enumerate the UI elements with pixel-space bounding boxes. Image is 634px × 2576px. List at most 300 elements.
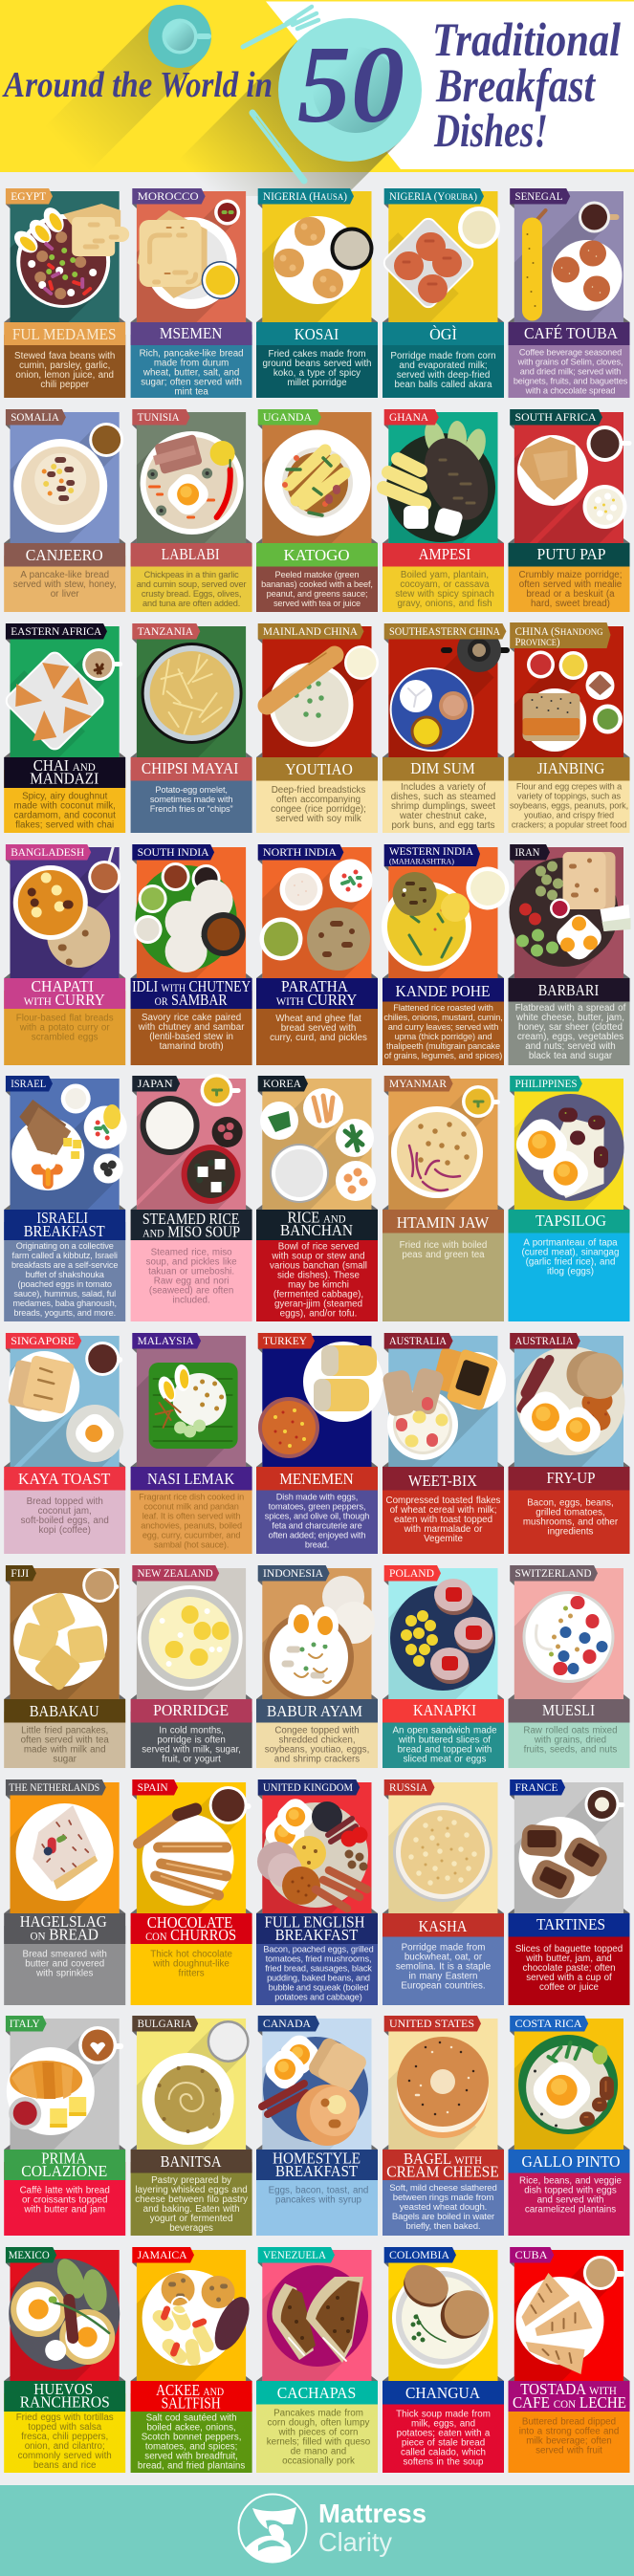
- illustration: banitsa: [45, 2020, 250, 2242]
- dish name: [383, 973, 504, 1002]
- dish name: STEAMED RICE: [142, 1210, 239, 1228]
- country tag: [384, 1333, 453, 1353]
- description: Boiled yam, plantain,: [401, 570, 489, 580]
- description: and tuna are often added.: [142, 599, 240, 608]
- description: gyeran-jjim (steamed: [274, 1299, 362, 1310]
- dish name: [509, 1694, 629, 1723]
- description: cream), eggs, vegetables: [517, 1032, 623, 1042]
- description: thalipeeth (multigrain pancake: [386, 1041, 500, 1051]
- dish name: [509, 1909, 629, 1937]
- country tag: [132, 844, 214, 864]
- description: [256, 2162, 378, 2236]
- description: [4, 1222, 125, 1321]
- illustration: hagelslag on bread: [0, 1803, 114, 1996]
- dish name: KATOGO: [283, 546, 350, 564]
- description: breads, yogurts, and more.: [13, 1308, 116, 1318]
- description: [256, 1926, 378, 2005]
- description: farm called a kibbutz, Israeli: [12, 1251, 118, 1260]
- dish name: BABUR AYAM: [267, 1702, 362, 1720]
- country tag: [384, 2016, 481, 2036]
- description: tomatoes, fried mushrooms,: [266, 1954, 371, 1964]
- country tag: [510, 188, 570, 208]
- description: sometimes made with: [150, 795, 232, 804]
- country tag: [6, 2247, 56, 2267]
- dish name: [256, 1462, 378, 1490]
- description: [4, 556, 125, 612]
- dish name: BANCHAN: [280, 1221, 353, 1239]
- dish name: BABAKAU: [30, 1702, 99, 1720]
- illustration: chocolate con churros: [45, 1786, 251, 2003]
- dish name: [4, 2145, 125, 2180]
- description: with pieces of corn: [278, 2428, 358, 2438]
- dish name: [131, 2376, 252, 2412]
- description: kernels; filled with queso: [267, 2437, 371, 2448]
- description: Bagels are boiled in water: [392, 2212, 495, 2222]
- dish name: KAYA TOAST: [18, 1470, 110, 1488]
- dish name: [256, 753, 378, 780]
- country tag: FRANCE: [514, 1780, 558, 1794]
- dish name: [509, 2376, 629, 2412]
- description: and evaporated milk;: [399, 360, 488, 371]
- dish name: ON BREAD: [30, 1926, 98, 1943]
- country tag: [132, 409, 190, 429]
- description: anchovies, peanuts, boiled: [141, 1521, 242, 1531]
- description: bread and topped with: [398, 1745, 492, 1756]
- illustration: chapati with curry: [10, 847, 120, 978]
- icon: coffee cup: [148, 5, 211, 68]
- dish name: [4, 1909, 125, 1944]
- description: commonly served with: [18, 2451, 112, 2461]
- description: bananas) cooked with a beef,: [261, 579, 373, 589]
- dish name: RICE AND: [287, 1209, 346, 1226]
- description: Savory rice cake paired: [142, 1013, 241, 1023]
- country tag: EASTERN AFRICA: [11, 624, 102, 638]
- description: [383, 1479, 504, 1554]
- dish name: [256, 1205, 378, 1240]
- dish name: ISRAELI: [36, 1209, 88, 1227]
- description: [4, 2162, 125, 2236]
- dish name: [131, 1462, 252, 1490]
- dish name: [383, 753, 504, 780]
- description: [509, 1222, 629, 1321]
- illustration: ackee and saltfish: [47, 2270, 256, 2461]
- dish name: KANDE POHE: [396, 982, 490, 1000]
- country tag: POLAND: [389, 1566, 434, 1580]
- dish name: WEET-BIX: [408, 1472, 477, 1490]
- card: Menemen: [256, 1333, 383, 1554]
- card: Homestyle Breakfast: [172, 2016, 378, 2236]
- dish name: KOSAI: [295, 325, 339, 343]
- description: beignets, fruits, and baguettes: [514, 376, 628, 385]
- illustration: babakau: [0, 1568, 119, 1783]
- dish name: [256, 1694, 378, 1723]
- illustration: prima colazione: [0, 2026, 123, 2235]
- dish name: AMPESI: [419, 545, 470, 563]
- country tag: [258, 2247, 335, 2267]
- illustration: canjeero: [10, 423, 123, 543]
- card: Steamed Rice and Miso Soup: [27, 1074, 252, 1321]
- description: (fermented cabbage),: [273, 1290, 363, 1300]
- description: breakfasts are a self-service: [11, 1260, 118, 1270]
- description: Soft, mild cheese slathered: [389, 2183, 497, 2194]
- description: variety of toppings, such as: [517, 792, 622, 801]
- description: [256, 335, 378, 398]
- country tag: SOUTH INDIA: [138, 845, 209, 859]
- dish name: [509, 317, 629, 345]
- description: Fried cakes made from: [269, 349, 365, 360]
- description: Flour and egg crepes with a: [516, 782, 623, 792]
- description: shredded chicken,: [278, 1735, 356, 1745]
- dish name: CANJEERO: [26, 546, 103, 564]
- illustration: rice and banchan: [136, 1088, 376, 1317]
- description: Pastry prepared by: [151, 2175, 231, 2186]
- country tag: MAINLAND CHINA: [263, 624, 358, 638]
- country tag: SOUTH AFRICA: [514, 410, 597, 424]
- country tag: [6, 1333, 81, 1353]
- description: with soup or stew and: [271, 1252, 365, 1262]
- description: side dishes). These: [277, 1271, 361, 1281]
- country tag: [132, 623, 200, 644]
- dish name: OR SAMBAR: [155, 991, 228, 1009]
- logo wordmark: [318, 2499, 426, 2557]
- card: Gallo Pinto: [425, 2016, 629, 2236]
- description: with butter, jam, and: [525, 1954, 612, 1964]
- illustration: idli: [134, 862, 246, 978]
- country tag: CANADA: [263, 2017, 311, 2030]
- dish name: KASHA: [419, 1917, 467, 1935]
- country tag: [6, 1565, 36, 1585]
- dish name: JIANBING: [537, 759, 604, 777]
- description: with a potato curry or: [19, 1023, 110, 1034]
- description: served with deep-fried: [397, 370, 490, 381]
- card: Barbari: [509, 844, 631, 1065]
- dish name: [383, 1462, 504, 1490]
- dish name: IDLI WITH CHUTNEY: [132, 977, 251, 995]
- description: and baking. Eaten with: [143, 2204, 240, 2215]
- description: peas and green tea: [402, 1250, 485, 1260]
- description: [4, 2393, 125, 2473]
- illustration: porridge: [47, 1585, 243, 1781]
- dish name: BANITSA: [161, 2152, 222, 2171]
- dish name: [4, 753, 125, 788]
- description: cardamom, and coconut: [14, 811, 116, 821]
- dish name: DIM SUM: [410, 759, 475, 777]
- description: served with stew, honey,: [13, 579, 117, 590]
- description: and dried milk; served with: [520, 366, 621, 376]
- illustration: babur ayam: [165, 1576, 375, 1801]
- dish name: [131, 1909, 252, 1944]
- card: Cafe Touba: [509, 188, 629, 398]
- description: [4, 1712, 125, 1768]
- description: [383, 991, 504, 1065]
- card: Chai and Mandazi: [0, 623, 125, 844]
- country tag: SOUTHEASTERN CHINA: [389, 624, 500, 638]
- description: included.: [172, 1296, 210, 1306]
- country tag: MOROCCO: [138, 189, 199, 203]
- dish name: [4, 973, 125, 1009]
- description: [383, 1926, 504, 2005]
- logo wordmark: Clarity: [318, 2527, 392, 2557]
- description: served with milk, sugar,: [142, 1745, 241, 1756]
- dish name: ACKEE AND: [156, 2381, 224, 2399]
- illustration: barbari: [421, 852, 631, 1056]
- country tag: FIJI: [11, 1566, 29, 1580]
- dish name: WITH CURRY: [24, 991, 105, 1009]
- description: Salt cod sautéed with: [146, 2413, 237, 2424]
- description: with doughnut-like: [152, 1958, 230, 1969]
- dish name: [256, 1909, 378, 1944]
- card: Tartines: [417, 1779, 629, 2005]
- illustration: huevos rancheros: [0, 2255, 120, 2457]
- description: [509, 556, 629, 612]
- country tag: [6, 188, 53, 208]
- dish name: [131, 973, 252, 1009]
- description: Flour-based flat breads: [16, 1014, 114, 1024]
- description: [131, 1926, 252, 2005]
- description: corn dough, often lumpy: [268, 2418, 370, 2429]
- card: Israeli Breakfast: [0, 1076, 127, 1321]
- dish name: [131, 1205, 252, 1241]
- country tag: [132, 188, 206, 208]
- illustration: israeli breakfast: [0, 1084, 127, 1312]
- description: made with coconut milk,: [14, 801, 116, 812]
- country tag: SWITZERLAND: [514, 1566, 592, 1580]
- dish name: HAGELSLAG: [20, 1912, 107, 1931]
- country tag: AUSTRALIA: [389, 1334, 447, 1347]
- description: (seaweed) are often: [149, 1286, 233, 1297]
- description: Steamed rice, miso: [151, 1248, 232, 1258]
- description: upma (thick porridge) and: [395, 1032, 492, 1041]
- description: congee (rice porridge);: [271, 804, 366, 815]
- description: takuan or umeboshi.: [148, 1267, 234, 1277]
- dish name: [131, 538, 252, 566]
- card: Htamin Jaw: [294, 1076, 504, 1321]
- country tag: [510, 622, 610, 652]
- country tag: [258, 1565, 330, 1585]
- dish name: CHAI AND: [33, 756, 96, 775]
- country tag: PHILIPPINES: [514, 1077, 578, 1090]
- description: milk beverage; often: [526, 2435, 612, 2446]
- country tag: MEXICO: [9, 2248, 50, 2261]
- description: [4, 1479, 125, 1554]
- country tag: [6, 623, 107, 644]
- description: served with soy milk: [275, 814, 361, 824]
- description: chilies, onions, mustard, cumin,: [383, 1013, 503, 1022]
- description: beverages: [169, 2223, 213, 2234]
- description: Eggs, bacon, toast, and: [269, 2185, 368, 2195]
- illustration: nasi lemak: [50, 1363, 238, 1549]
- description: [4, 770, 125, 833]
- dish name: MUESLI: [542, 1701, 595, 1719]
- country tag: NIGERIA (YORUBA): [389, 189, 477, 203]
- description: fritters: [178, 1968, 205, 1978]
- illustration: tartines: [417, 1787, 625, 2001]
- country tag: SENEGAL: [514, 189, 562, 203]
- description: [509, 770, 629, 833]
- description: served with breadfruit,: [144, 2452, 238, 2462]
- description: various banchan (small: [270, 1261, 367, 1272]
- description: fruits, seeds, and nuts: [524, 1745, 617, 1756]
- title: Dishes!: [433, 103, 548, 157]
- description: A portmanteau of tapa: [523, 1238, 618, 1249]
- description: Stewed fava beans with: [14, 351, 115, 361]
- dish name: FUL MEDAMES: [12, 325, 117, 343]
- illustration: weet-bix: [279, 1347, 506, 1568]
- illustration: youtiao: [258, 645, 379, 757]
- description: and shrimp crackers: [274, 1754, 360, 1764]
- dish name: [256, 317, 378, 345]
- description: Pancakes made from: [273, 2409, 363, 2419]
- dish name: KANAPKI: [413, 1701, 476, 1719]
- description: Flattened rice roasted with: [393, 1003, 493, 1013]
- country tag: VENEZUELA: [263, 2248, 326, 2261]
- description: Crumbly maize porridge;: [519, 570, 622, 580]
- country tag: WESTERN INDIA: [389, 844, 473, 858]
- country tag: [6, 1779, 106, 1800]
- country tag: INDONESIA: [263, 1566, 323, 1580]
- description: Includes a variety of: [401, 782, 486, 793]
- description: with chutney and sambar: [138, 1022, 245, 1033]
- dish name: COLAZIONE: [21, 2162, 107, 2180]
- description: (garlic fried rice), and: [526, 1257, 615, 1268]
- card: Jianbing: [509, 622, 629, 833]
- description: [383, 1222, 504, 1321]
- description: scrambled eggs: [32, 1033, 98, 1043]
- card: Prima Colazione: [0, 2016, 125, 2236]
- description: onion, and cilantro;: [25, 2441, 105, 2452]
- icon: knife: [252, 113, 304, 181]
- description: black tea and sugar: [529, 1051, 613, 1061]
- dish name: HOMESTYLE: [273, 2150, 361, 2167]
- description: Bread smeared with: [23, 1949, 107, 1959]
- card: Idli with Chutney or Sambar: [130, 844, 252, 1065]
- card: Muesli: [425, 1565, 629, 1780]
- dish name: [4, 2376, 125, 2412]
- dish name: CHAPATI: [31, 977, 94, 995]
- card: Fry-Up: [426, 1333, 629, 1554]
- description: bean balls called akara: [394, 380, 492, 390]
- dish name: BAGEL WITH: [404, 2150, 482, 2168]
- description: Slices of baguette topped: [515, 1944, 623, 1954]
- description: kopi (coffee): [39, 1525, 91, 1536]
- description: In cold months,: [159, 1726, 224, 1736]
- country tag: SOMALIA: [11, 410, 59, 424]
- illustration: kaya toast: [0, 1342, 123, 1577]
- country tag: GHANA: [389, 410, 428, 424]
- country tag: [510, 2016, 588, 2036]
- description: peanut, and greens sauce;: [267, 589, 367, 599]
- country tag: UNITED KINGDOM: [263, 1780, 353, 1794]
- description: [256, 2393, 378, 2473]
- description: Fried eggs with tortillas: [16, 2412, 114, 2423]
- description: [131, 335, 252, 398]
- country tag: [6, 2016, 47, 2036]
- country tag: [258, 188, 354, 208]
- description: [131, 2162, 252, 2236]
- description: often served with mealie: [519, 579, 623, 590]
- description: crusty bread. Eggs, olives,: [142, 589, 241, 599]
- description: may be kimchi: [288, 1280, 349, 1291]
- country tag: NORTH INDIA: [263, 845, 337, 859]
- dish name: CHOCOLATE: [147, 1913, 232, 1932]
- description: milk, eggs, and: [411, 2418, 475, 2429]
- description: with grains of Selim, cloves,: [517, 357, 623, 366]
- description: and nuts; served with: [525, 1041, 616, 1052]
- dish name: CON CHURROS: [145, 1926, 236, 1944]
- card: Chapati with Curry: [0, 844, 125, 1080]
- illustration: lablabi: [137, 431, 244, 543]
- description: Porridge made from corn: [390, 351, 496, 361]
- country tag: [510, 844, 550, 864]
- description: Fragrant rice dish cooked in: [139, 1493, 244, 1502]
- dish name: [509, 1205, 629, 1233]
- description: [4, 991, 125, 1065]
- description: buffet of shakshouka: [26, 1270, 105, 1279]
- description: occasionally pork: [282, 2456, 355, 2467]
- card: Msemen: [130, 188, 252, 398]
- country tag: [258, 1333, 315, 1353]
- title: [2, 12, 621, 157]
- card: Paratha with Curry: [256, 844, 378, 1065]
- description: fruit, or yogurt: [162, 1755, 221, 1765]
- dish name: NASI LEMAK: [147, 1470, 234, 1488]
- description: pudding, baked beans, and: [267, 1974, 370, 1983]
- description: [131, 770, 252, 833]
- country tag: SINGAPORE: [11, 1334, 75, 1347]
- description: or croissants topped: [22, 2194, 107, 2205]
- description: crackers; a popular street food: [512, 820, 626, 830]
- illustration: putu pap: [514, 426, 631, 543]
- title: Around the World in: [2, 65, 273, 105]
- illustration: chipsi mayai: [137, 643, 243, 757]
- dish name: PARATHA: [281, 977, 348, 995]
- dish name: [509, 538, 629, 566]
- description: [131, 2393, 252, 2473]
- country tag: [510, 1076, 582, 1096]
- description: softens in the soup: [403, 2456, 484, 2467]
- card: Nasi Lemak: [50, 1333, 252, 1554]
- card: Porridge: [47, 1565, 252, 1781]
- header banner: [0, 0, 634, 210]
- description: dish topped with eggs: [524, 2186, 617, 2196]
- description: chili pepper: [40, 380, 90, 390]
- dish name: CAFE CON LECHE: [513, 2393, 626, 2412]
- dish name: SALTFISH: [162, 2394, 221, 2412]
- dish name: MENEMEN: [279, 1470, 354, 1488]
- description: sugar: [53, 1755, 77, 1765]
- country tag: TUNISIA: [138, 410, 180, 424]
- dish name: CACHAPAS: [277, 2384, 356, 2402]
- description: buckwheat, oat, or: [404, 1952, 483, 1962]
- description: and curry leaves; served with: [388, 1022, 498, 1032]
- description: and served with: [537, 2195, 603, 2206]
- card: Huevos Rancheros: [0, 2247, 125, 2473]
- card: Canjeero: [4, 409, 126, 612]
- description: Raw egg and nori: [154, 1277, 229, 1287]
- description: hard, sweet bread): [531, 599, 610, 609]
- country tag: [384, 623, 506, 644]
- card: Putu Pap: [509, 409, 631, 612]
- country tag: COSTA RICA: [514, 2017, 582, 2030]
- dish name: [4, 1462, 125, 1490]
- description: [131, 1222, 252, 1321]
- description: sambal (hot sauce).: [154, 1540, 229, 1550]
- description: (lentil-based stew in: [149, 1032, 233, 1042]
- icon: mattress clarity logo: [239, 2494, 306, 2572]
- dish name: [509, 1462, 629, 1490]
- description: Rich, pancake-like bread: [140, 348, 244, 359]
- description: bread served with: [281, 1023, 356, 1034]
